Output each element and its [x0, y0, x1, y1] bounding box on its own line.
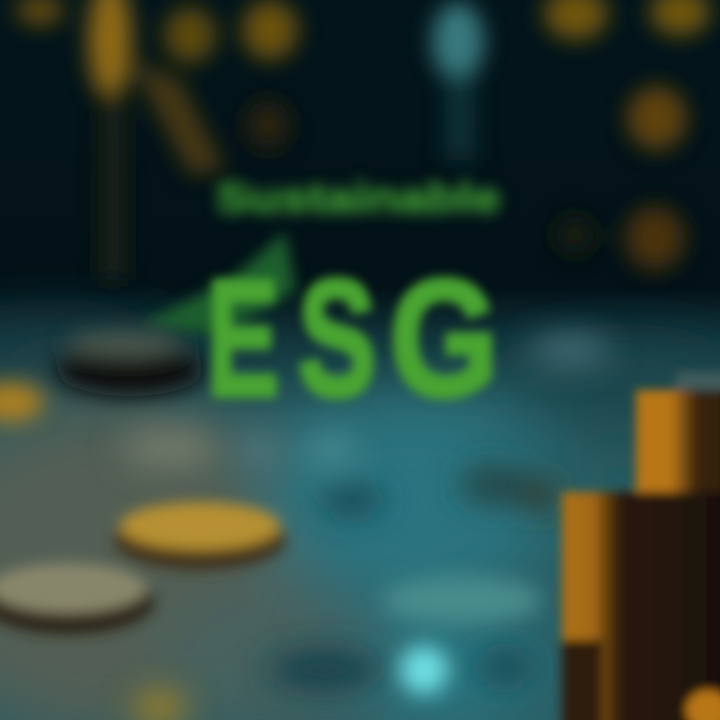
glow: cyan light: [400, 646, 448, 694]
coin: centre gold: [114, 502, 286, 570]
coin: lower left pale: [0, 563, 154, 634]
heading: blurred text line: Sustainable: [216, 174, 500, 221]
title: ESG: S: [298, 246, 376, 430]
title: ESG: [207, 246, 498, 430]
coin: lower centre teal: [382, 576, 542, 624]
title: ESG: E: [207, 246, 279, 430]
top lights and bokeh: [16, 0, 710, 280]
title: ESG: G: [390, 246, 498, 430]
chart arrow line: [140, 232, 296, 335]
table surface tones: [0, 330, 720, 720]
coin: dark stack behind ESG: [56, 331, 204, 396]
coin: left edge gold: [0, 382, 44, 422]
faint surface marks: [120, 336, 612, 720]
coin stacks: right foreground: [562, 372, 720, 720]
